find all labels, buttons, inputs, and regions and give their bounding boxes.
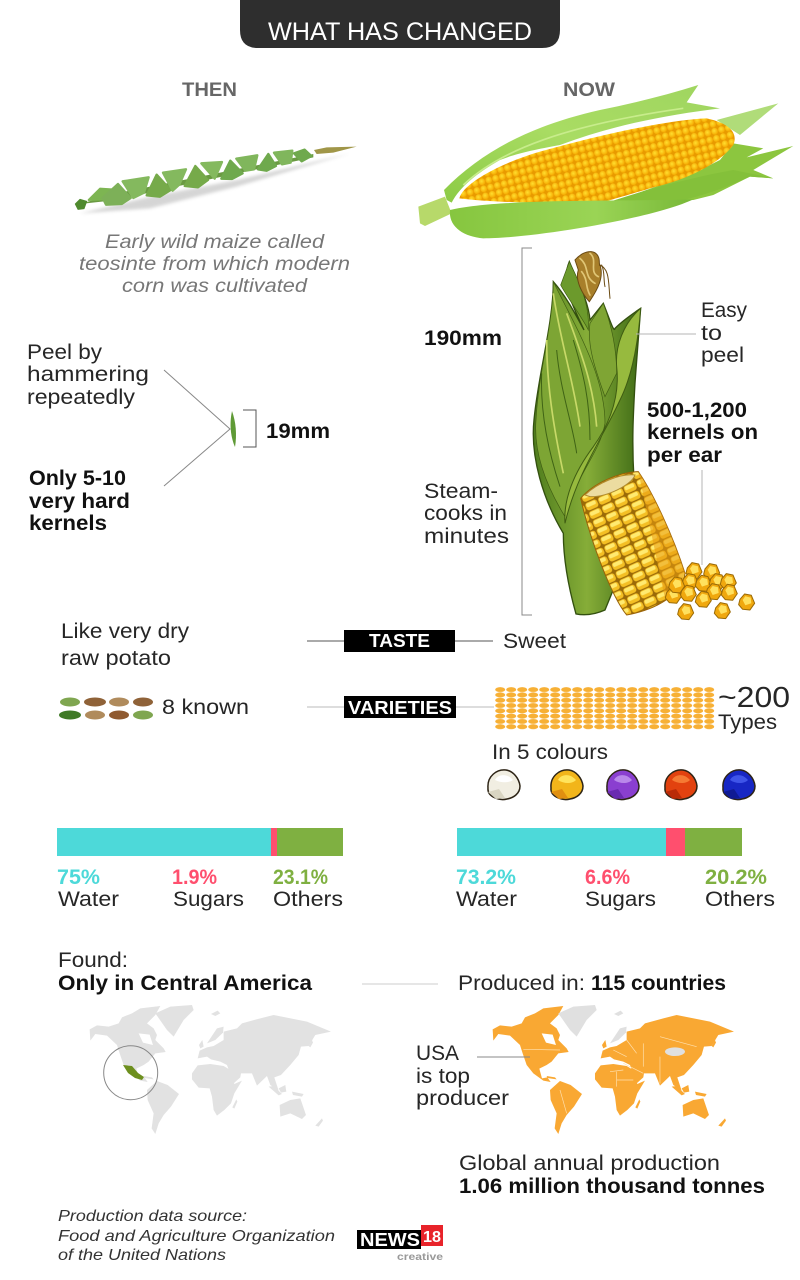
label: produced in — [458, 972, 726, 995]
title: WHAT HAS CHANGED — [268, 18, 532, 46]
label: produced in: 115 countries — [591, 972, 726, 995]
label: steam cooks: minutes — [424, 525, 509, 548]
scale bracket: 19mm — [243, 410, 256, 447]
legend: then composition: 1.9% — [172, 866, 217, 889]
mexico highlight — [123, 1065, 144, 1080]
map: native range — [90, 1005, 331, 1134]
legend: now composition — [456, 866, 775, 911]
legend: then composition: Others — [273, 888, 343, 911]
label: global production: 1.06 million thousand tonnes — [459, 1175, 765, 1198]
silk — [575, 252, 610, 302]
label: found: Only in Central America — [58, 972, 312, 995]
label: sweet: Sweet — [503, 630, 566, 653]
label: global production: Global annual production — [459, 1152, 720, 1175]
legend: then composition: Water — [58, 888, 119, 911]
row heading: taste — [307, 630, 493, 652]
map: global production — [493, 1005, 734, 1134]
scale bracket: 190mm — [522, 248, 532, 615]
label: steam cooks — [424, 480, 509, 548]
label: usa top producer: producer — [416, 1087, 509, 1110]
label: found — [58, 949, 312, 995]
illustration: corn plant with cob — [533, 252, 755, 620]
loose kernels — [665, 563, 755, 620]
bar chart: now composition — [457, 828, 742, 856]
label: usa top producer — [416, 1042, 530, 1110]
source note: of the United Nations — [58, 1247, 226, 1264]
icon grid: 200 kernels — [495, 687, 715, 729]
caption: teosinte: corn was cultivated — [122, 276, 309, 297]
label: easy to peel: peel — [701, 344, 744, 367]
label: peel by hammering: Peel by — [27, 341, 103, 364]
label: in 5 colours: In 5 colours — [492, 741, 608, 764]
label: usa top producer: is top — [416, 1065, 470, 1088]
logo: news18 creative: NEWS — [360, 1230, 420, 1250]
icon: eight teosinte seeds — [59, 698, 153, 720]
source note: Production data source: — [58, 1208, 247, 1225]
label: steam cooks: cooks in — [424, 502, 507, 525]
label: kernel count then — [29, 467, 130, 535]
legend: then composition: 75% — [57, 866, 100, 889]
source note — [58, 1208, 335, 1264]
label: 8 known: 8 known — [162, 696, 249, 719]
label: 200 types: Types — [718, 711, 777, 734]
label: easy to peel — [636, 299, 747, 367]
label: 200 types: ~200 — [718, 682, 790, 714]
illustration: teosinte ear — [75, 147, 357, 213]
label: kernel count then: Only 5-10 — [29, 467, 126, 490]
legend: now composition: 20.2% — [705, 866, 767, 889]
label: kernel count now: per ear — [647, 444, 722, 467]
logo: news18 creative — [357, 1225, 444, 1263]
bar chart: then composition — [57, 828, 343, 856]
legend: now composition: Others — [705, 888, 775, 911]
legend: now composition: 6.6% — [585, 866, 630, 889]
label: peel by hammering: repeatedly — [27, 386, 136, 409]
row heading: taste: TASTE — [369, 631, 430, 651]
label: peel by hammering: hammering — [27, 363, 149, 386]
circle marker — [104, 1046, 158, 1100]
caption: teosinte: Early wild maize called — [105, 232, 326, 253]
label: kernel count now: 500-1,200 — [647, 399, 747, 422]
label: 200 types — [718, 682, 790, 734]
legend: now composition: 73.2% — [456, 866, 516, 889]
heading: now: NOW — [563, 80, 615, 101]
heading: then: THEN — [182, 80, 237, 101]
cob — [581, 472, 685, 615]
label: 190mm: 190mm — [424, 327, 502, 350]
label: kernel count now: kernels on — [647, 421, 758, 444]
label: kernel count now — [647, 399, 758, 565]
legend: then composition: 23.1% — [273, 866, 328, 889]
label: easy to peel: to — [701, 322, 722, 345]
label: global production — [459, 1152, 765, 1198]
label: found: Found: — [58, 949, 128, 972]
label: 19mm: 19mm — [266, 420, 330, 443]
illustration: modern corn ear — [418, 85, 793, 238]
label: peel by hammering — [27, 341, 149, 409]
icons: five coloured kernels — [488, 770, 755, 800]
caption: teosinte — [79, 232, 350, 297]
label: usa top producer: USA — [416, 1042, 459, 1065]
row heading: varieties — [307, 696, 494, 718]
logo: news18 creative: 18 — [423, 1229, 441, 1246]
connector lines and tiny teosinte — [164, 370, 236, 486]
label: taste then — [61, 620, 190, 670]
label: steam cooks: Steam- — [424, 480, 498, 503]
caption: teosinte: teosinte from which modern — [79, 254, 350, 275]
label: kernel count then: very hard — [29, 490, 130, 513]
logo: news18 creative: creative — [397, 1252, 444, 1263]
legend: now composition: Water — [456, 888, 517, 911]
row heading: varieties: VARIETIES — [348, 698, 452, 718]
title — [240, 0, 560, 48]
label: taste then: Like very dry — [61, 620, 190, 643]
legend: then composition: Sugars — [173, 888, 244, 911]
legend: now composition: Sugars — [585, 888, 656, 911]
legend: then composition — [57, 866, 343, 911]
label: kernel count then: kernels — [29, 512, 107, 535]
source note: Food and Agriculture Organization — [58, 1228, 335, 1245]
label: taste then: raw potato — [61, 647, 171, 670]
label: produced in: Produced in: — [458, 972, 585, 995]
husk — [533, 262, 641, 615]
label: easy to peel: Easy — [701, 299, 747, 322]
